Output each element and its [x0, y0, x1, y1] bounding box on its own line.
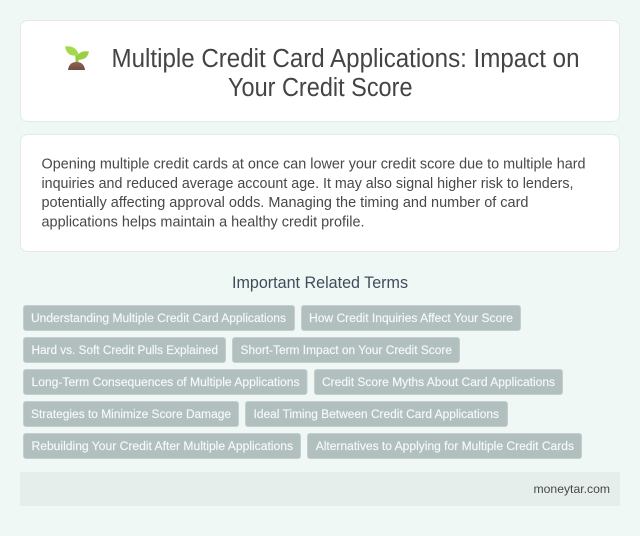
tag: Ideal Timing Between Credit Card Applications — [254, 407, 499, 421]
tag — [24, 370, 307, 394]
icon: seedling — [65, 46, 89, 70]
title line 2: Your Credit Score — [228, 74, 412, 102]
tag — [232, 338, 460, 362]
tag — [314, 370, 562, 394]
tag — [308, 434, 582, 458]
heading: related terms: Important Related Terms — [232, 274, 408, 292]
tag: Strategies to Minimize Score Damage — [31, 407, 231, 421]
tag: Understanding Multiple Credit Card Applications — [31, 311, 286, 325]
tag: Hard vs. Soft Credit Pulls Explained — [32, 343, 218, 357]
related term tags — [24, 306, 582, 458]
title line 1: Multiple Credit Card Applications: Impact on — [112, 45, 580, 73]
tag — [24, 434, 300, 458]
panel: title card — [20, 20, 620, 122]
footer — [20, 472, 620, 506]
tag — [302, 306, 520, 330]
tag: Long-Term Consequences of Multiple Applications — [32, 375, 300, 389]
tag: Short-Term Impact on Your Credit Score — [240, 343, 452, 357]
summary line 1: Opening multiple credit cards at once can lower your credit score due to multiple hard — [42, 156, 586, 172]
tag — [24, 402, 238, 426]
tag: Alternatives to Applying for Multiple Credit Cards — [316, 439, 574, 453]
tag — [24, 306, 294, 330]
tag: Credit Score Myths About Card Applications — [322, 375, 555, 389]
summary line 2: inquiries and reduced average account age. It may also signal higher risk to lenders, — [42, 176, 574, 192]
tag — [24, 338, 226, 362]
summary line 4: applications helps maintain a healthy credit profile. — [42, 214, 364, 230]
tag: Rebuilding Your Credit After Multiple Applications — [32, 439, 293, 453]
tag — [246, 402, 508, 426]
summary line 3: potentially affecting approval odds. Managing the timing and number of card — [42, 195, 528, 211]
footer site name: moneytar.com — [534, 482, 610, 496]
tag: How Credit Inquiries Affect Your Score — [309, 311, 513, 325]
panel: summary — [20, 134, 620, 252]
